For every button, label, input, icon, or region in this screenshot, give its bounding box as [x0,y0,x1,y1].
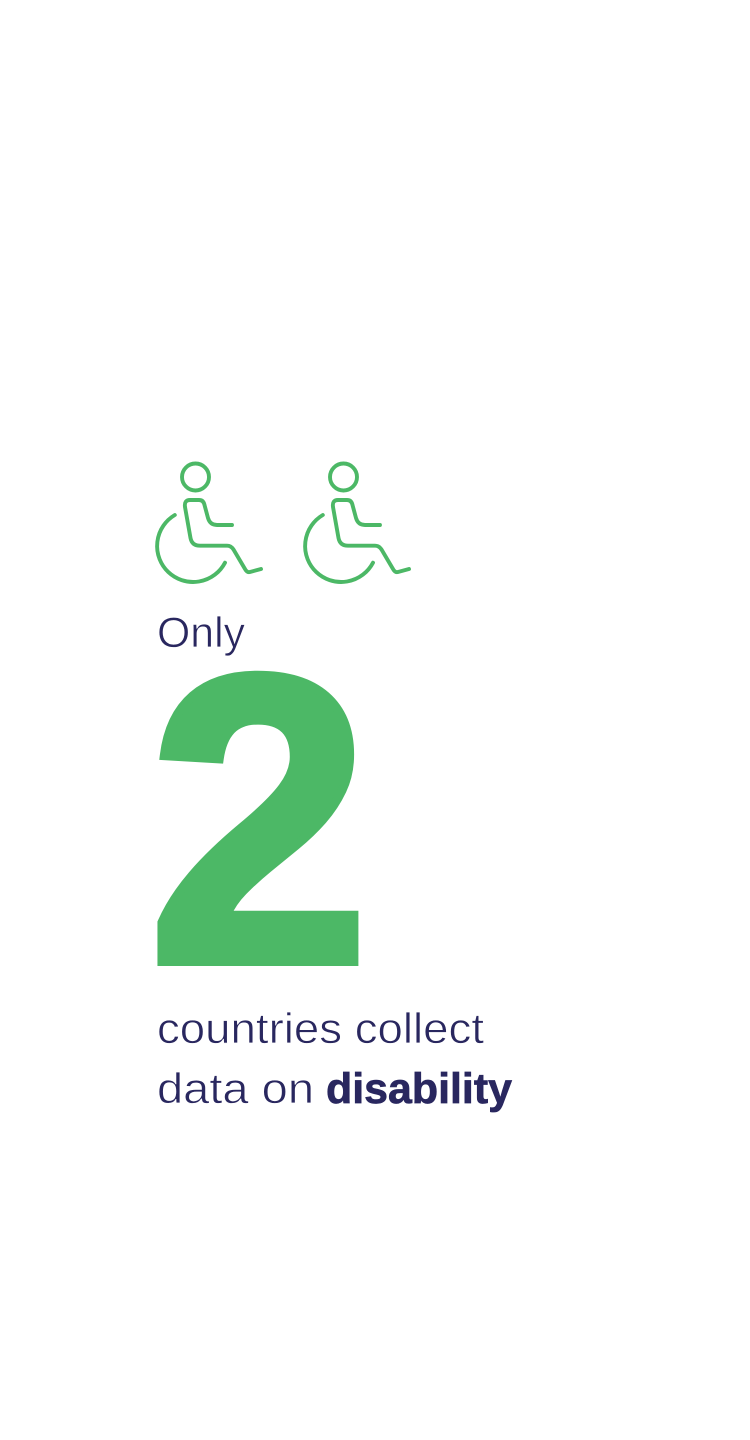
text: data on disability [157,1065,512,1113]
text: Only: Only [157,609,245,657]
text: data on disability: disability [326,1065,512,1113]
icon: wheelchair user 2 [305,464,409,582]
big number 2: 2 [148,590,370,1048]
text: countries collect: countries collect [157,1005,484,1053]
icon: wheelchair user 1 [157,464,261,582]
text: data on disability: data on [157,1065,314,1113]
